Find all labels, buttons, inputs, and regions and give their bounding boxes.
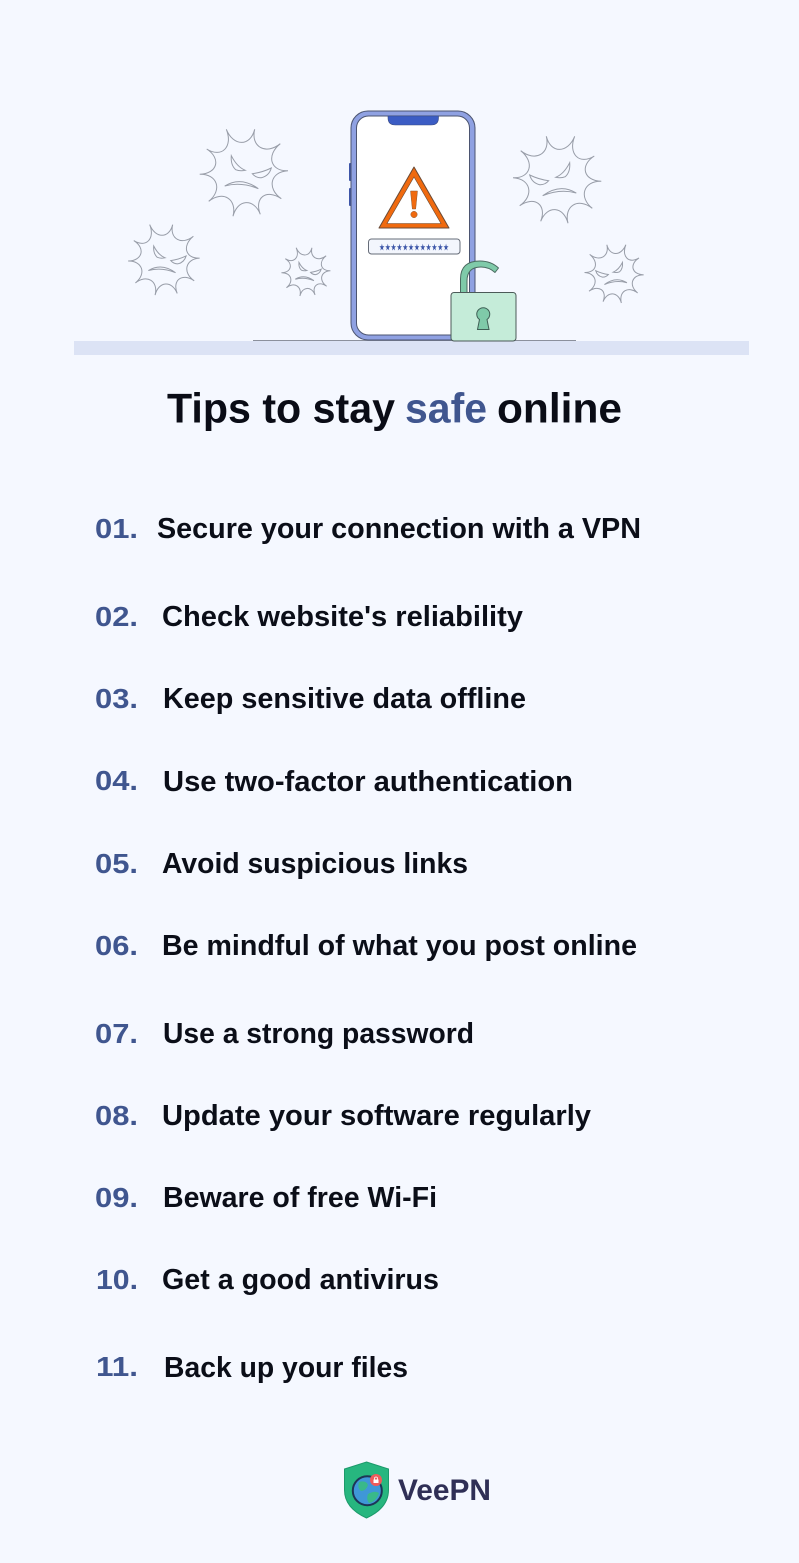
tip 02: Check website's reliability <box>162 601 523 633</box>
tip 05: Avoid suspicious links <box>162 848 468 880</box>
tip 07: 07. <box>95 1018 138 1049</box>
title: online <box>497 384 622 432</box>
icon: open padlock <box>451 261 516 341</box>
icon: smartphone <box>349 111 475 340</box>
ground bar <box>74 341 749 355</box>
title: safe <box>405 384 487 432</box>
password field <box>368 239 460 254</box>
tip 03: 03. <box>95 683 138 714</box>
tip 05: 05. <box>95 848 138 879</box>
logo: VeePN: VeePN <box>398 1474 491 1507</box>
tip 03: Keep sensitive data offline <box>163 683 526 715</box>
title: Tips to stay <box>167 384 396 432</box>
tip 04: 04. <box>95 765 138 796</box>
tip 04: Use two-factor authentication <box>163 766 573 798</box>
icon: large angry virus right <box>513 136 601 223</box>
icon: large angry virus left <box>200 129 288 216</box>
tip 06: 06. <box>95 930 138 961</box>
icon: warning triangle <box>379 167 449 228</box>
logo: VeePN <box>344 1462 491 1518</box>
tip 09: 09. <box>95 1182 138 1213</box>
tip 07: Use a strong password <box>163 1018 474 1050</box>
icon: shield with globe <box>344 1462 388 1518</box>
icon: small angry virus right <box>585 245 644 303</box>
tip 10: 10. <box>96 1264 138 1295</box>
tip 09: Beware of free Wi-Fi <box>163 1182 437 1214</box>
tip 01: 01. <box>95 513 138 544</box>
icon: small angry virus left <box>281 248 330 296</box>
tip 02: 02. <box>95 601 138 632</box>
tip 08: 08. <box>95 1100 138 1131</box>
tip 11: 11. <box>96 1351 138 1382</box>
password field: ★★★★★★★★★★★★ <box>379 242 449 254</box>
tip 11: Back up your files <box>164 1352 408 1384</box>
tip 10: Get a good antivirus <box>162 1264 439 1296</box>
icon: medium angry virus left <box>128 225 200 295</box>
tip 08: Update your software regularly <box>162 1100 591 1132</box>
tip 06: Be mindful of what you post online <box>162 930 637 962</box>
tip 01: Secure your connection with a VPN <box>157 513 641 545</box>
title <box>167 384 622 432</box>
illustration: phone, viruses and lock <box>74 111 749 355</box>
